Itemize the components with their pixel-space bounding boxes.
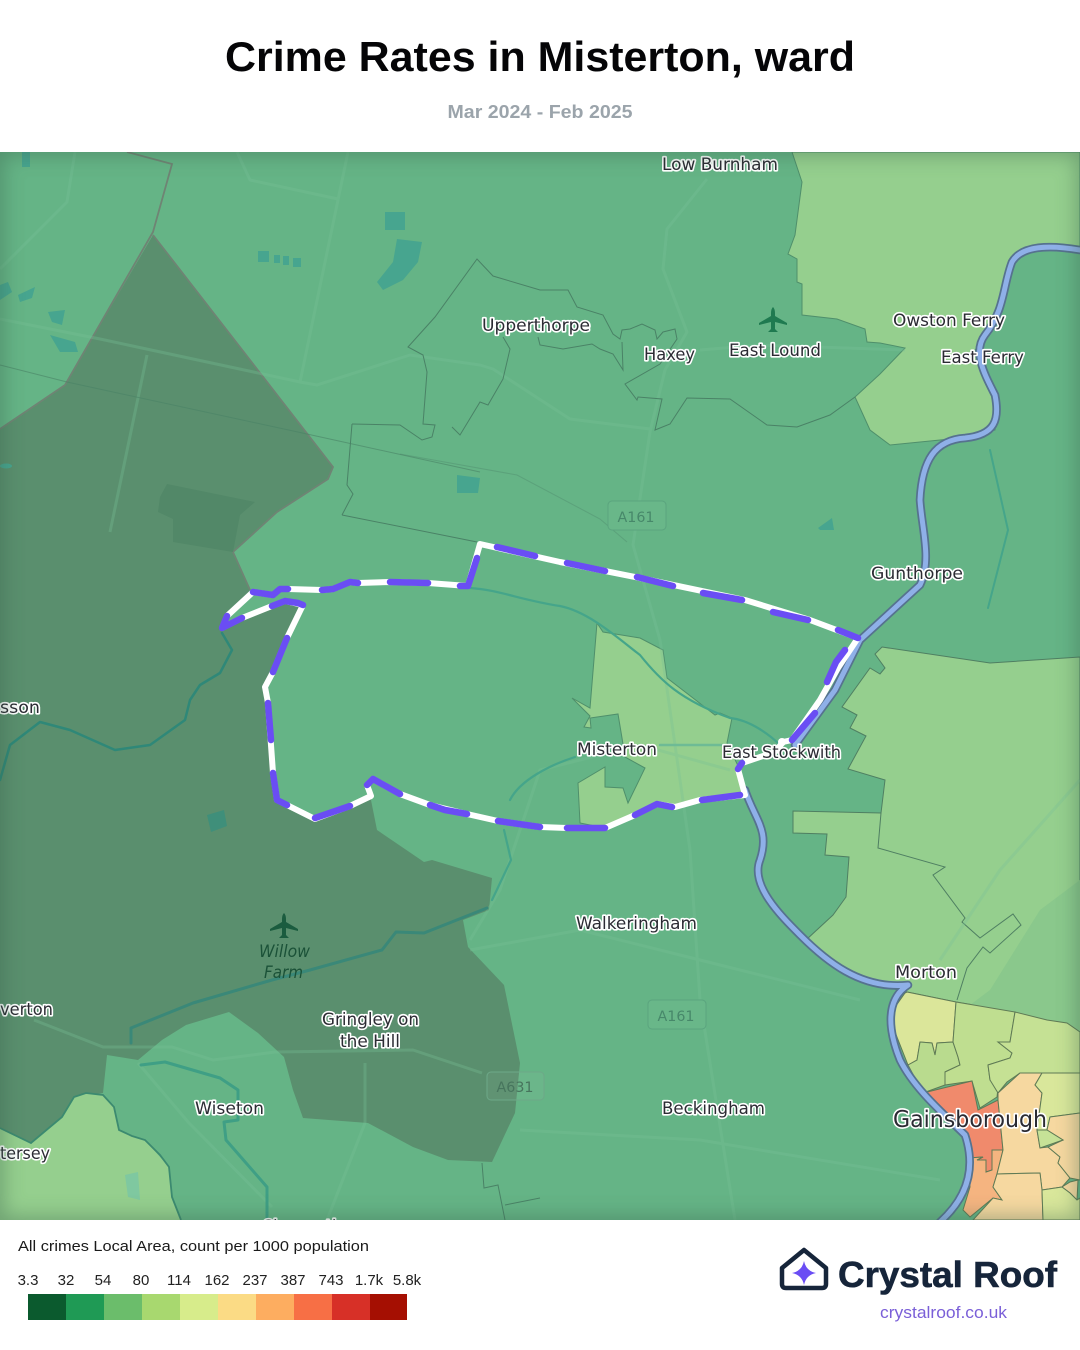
title: Crime Rates in Misterton, ward [225, 33, 855, 80]
road shield A631 [487, 1072, 544, 1100]
place labels: Upperthorpe [482, 316, 590, 335]
legend scale values [18, 1272, 422, 1289]
region: light area east [793, 647, 1080, 1032]
legend scale values: 387 [280, 1272, 306, 1289]
region: Misterton village [572, 623, 748, 828]
legend colour bar [28, 1294, 407, 1320]
place labels: Morton [895, 963, 957, 982]
icon: house outline [782, 1250, 826, 1288]
place labels: Gunthorpe [871, 564, 963, 583]
place labels: East Lound [729, 341, 821, 360]
region: high-count dark area west [0, 235, 520, 1162]
place labels: East Ferry [941, 348, 1024, 367]
website link: crystalroof.co.uk [880, 1304, 1008, 1322]
road shield A631: A631 [496, 1080, 534, 1096]
icon: airfield Willow Farm [270, 913, 298, 938]
region: woodland in dark area [159, 485, 238, 552]
legend scale values: 32 [58, 1272, 74, 1289]
legend scale values: 5.8k [393, 1272, 422, 1289]
legend scale values: 1.7k [355, 1272, 384, 1289]
region: dark area border [0, 152, 333, 590]
subtitle: date range: Mar 2024 - Feb 2025 [448, 101, 632, 122]
place labels: Walkeringham [576, 914, 697, 933]
region: light area north-east [788, 152, 1080, 445]
place labels: Gainsborough [893, 1107, 1047, 1133]
region: internal ward lines east [878, 813, 1021, 1000]
place labels: Willow [259, 942, 310, 961]
place labels: Wiseton [195, 1099, 264, 1118]
place labels: Owston Ferry [893, 311, 1005, 330]
Misterton ward boundary [222, 544, 858, 828]
road shield A161 south: A161 [658, 1009, 694, 1025]
place labels [0, 155, 1047, 1236]
place labels: Misterton [577, 740, 657, 759]
place labels: Gringley on [322, 1010, 419, 1029]
legend scale values: 743 [318, 1272, 344, 1289]
road shield A161 south [648, 1000, 706, 1029]
place labels: tersey [0, 1144, 50, 1163]
region: mid-green area east [970, 880, 1080, 1032]
place labels: Low Burnham [662, 155, 778, 174]
river Trent [745, 247, 1080, 1222]
legend scale values: 237 [242, 1272, 268, 1289]
logo: Crystal Roof [782, 1250, 1058, 1295]
icon: airfield East Lound [759, 307, 787, 332]
logo wordmark: Crystal Roof [838, 1254, 1058, 1295]
place labels: verton [0, 1000, 53, 1019]
map details: faint roads [34, 336, 1080, 1123]
legend scale values: 162 [204, 1272, 230, 1289]
legend scale values: 114 [167, 1272, 191, 1289]
road shield A161 north: A161 [618, 510, 654, 526]
map edge vignette [0, 152, 1080, 1220]
place labels: Beckingham [662, 1099, 765, 1118]
place labels: the Hill [340, 1032, 400, 1051]
place labels: East Stockwith [722, 743, 841, 762]
road shield A161 north [608, 501, 666, 530]
legend scale values: 80 [133, 1272, 149, 1289]
place labels: Haxey [644, 345, 695, 364]
icon: crystal star [792, 1261, 816, 1285]
legend scale values: 54 [95, 1272, 111, 1289]
place labels: Farm [264, 963, 303, 982]
map details: ward outlines and rail line [0, 259, 855, 1220]
legend title: All crimes Local Area, count per 1000 population [18, 1238, 369, 1255]
map details: water bodies and buildings [0, 152, 834, 1200]
region: light area south-west [0, 1093, 181, 1220]
map details: streams [0, 450, 1008, 1222]
legend scale values: 3.3 [18, 1272, 38, 1289]
place labels: Clayworth [262, 1217, 342, 1236]
place labels: sson [0, 698, 40, 717]
region: Gainsborough wards [888, 992, 1080, 1220]
